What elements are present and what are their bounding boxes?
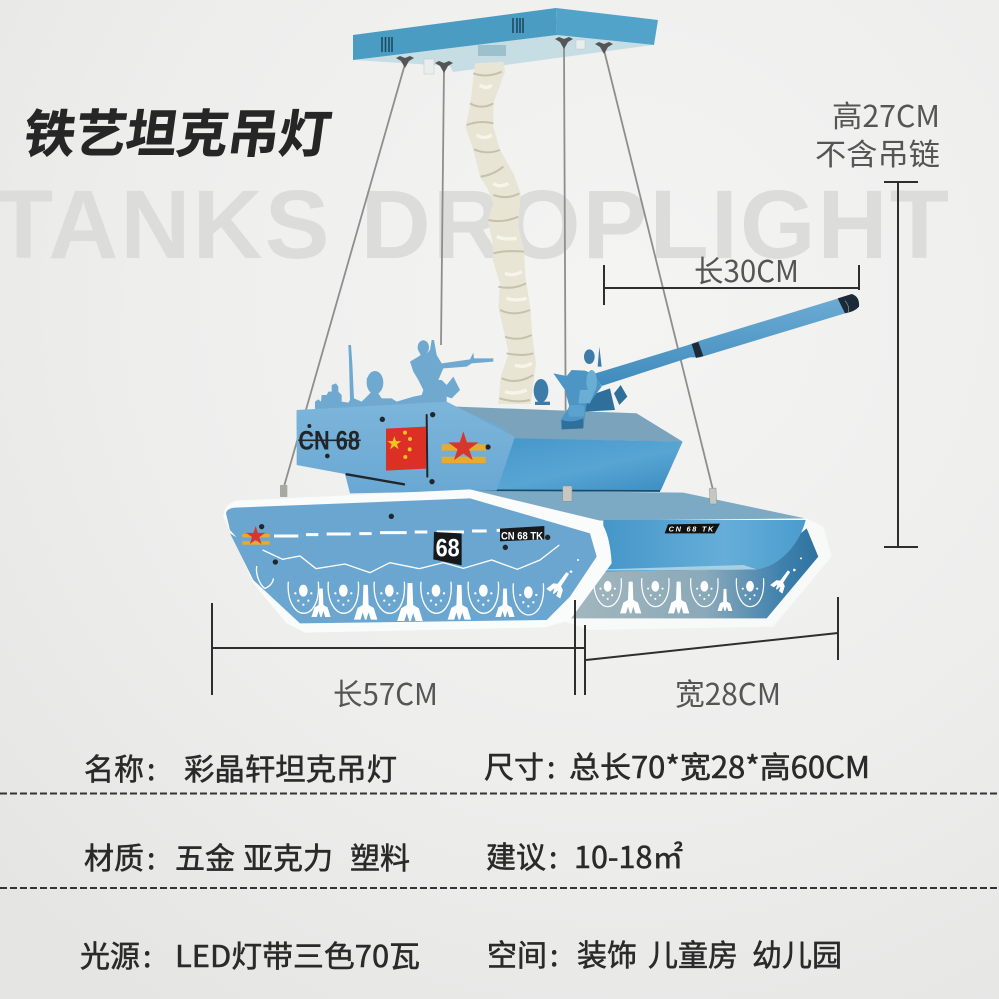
row 3 right: space: 空间	[487, 931, 547, 975]
row 2 left: material	[84, 834, 410, 878]
flag	[386, 427, 426, 471]
tank front: upper panel and track	[223, 402, 612, 633]
dimension: barrel length	[604, 247, 859, 305]
title: 铁艺坦克吊灯	[20, 106, 334, 163]
row 1 left: name: :	[147, 745, 155, 789]
fabric cord cover	[465, 62, 536, 404]
row 1 right: size: :	[547, 743, 555, 787]
row 3 left: light source: 光源	[80, 932, 140, 976]
dimension: height	[815, 92, 940, 547]
dimension: barrel length: 长30CM	[694, 247, 799, 291]
row 3 right: space	[487, 931, 842, 975]
row 1 left: name	[84, 745, 397, 789]
turret rear shields and silhouette	[534, 347, 627, 412]
row 3 right: space: 幼儿园	[752, 931, 842, 975]
rear track	[570, 528, 818, 618]
row 2 right: area: 10-18㎡	[574, 833, 683, 877]
gun mount	[553, 370, 602, 429]
row 3 left: light source	[80, 932, 420, 976]
row 3 right: space: :	[550, 931, 558, 975]
front ferrule	[280, 485, 287, 497]
upper panel	[297, 402, 515, 493]
row 2 left: material: 五金	[175, 834, 235, 878]
plate 68: 68	[436, 536, 460, 563]
front track halo	[223, 489, 612, 633]
row 3 right: space: 装饰	[577, 931, 637, 975]
ceiling plate	[353, 8, 658, 74]
row 1 right: size: 尺寸	[484, 743, 544, 787]
row 1 left: name: 彩晶轩坦克吊灯	[184, 745, 397, 789]
row 2 right: area: :	[549, 833, 557, 877]
watermark heading: TANKS DROPLIGHT	[0, 170, 949, 279]
row 2 left: material: :	[147, 834, 155, 878]
rear track halo	[560, 513, 832, 630]
turret	[440, 406, 683, 491]
row 1 left: name: 名称	[84, 745, 144, 789]
dimension: width	[585, 597, 838, 714]
plate CN 68 TK: CN 68 TK	[669, 524, 714, 533]
dimension: height: 高27CM	[832, 92, 940, 136]
row 2 right: area: 建议	[486, 833, 546, 877]
dimension: body length	[212, 600, 585, 714]
track wavy line	[263, 545, 559, 573]
lower hull	[440, 490, 806, 572]
front track panel	[226, 498, 597, 623]
row 2 left: material: 亚克力	[243, 834, 333, 878]
row 2 left: material: 塑料	[350, 834, 410, 878]
wire ferrules	[563, 486, 717, 504]
CN 68 marking: CN 68	[298, 425, 360, 455]
dimension: height: 不含吊链	[815, 130, 940, 174]
screws	[307, 412, 491, 484]
suspension wires	[283, 45, 713, 490]
spec table	[0, 743, 999, 976]
dark stripes	[347, 415, 427, 484]
star emblem	[442, 431, 486, 463]
row 3 right: space: 儿童房	[648, 931, 738, 975]
gun barrel	[593, 294, 859, 386]
row 2 right: area	[486, 833, 683, 877]
road wheels	[256, 559, 579, 621]
row 3 left: light source: LED灯带三色70瓦	[175, 932, 420, 976]
plate CN 68 TK: CN 68 TK	[501, 530, 544, 542]
wire clips	[396, 37, 613, 73]
row 1 right: size: 总长70*宽28*高60CM	[569, 743, 870, 787]
upper panel silhouette	[297, 340, 510, 430]
tank rear: hull, turret, gun	[440, 406, 832, 630]
track stripe	[274, 530, 510, 536]
track screws	[259, 514, 550, 565]
dimension: body length: 长57CM	[333, 670, 438, 714]
track star emblem	[242, 526, 270, 545]
plate CN 68 TK	[500, 526, 544, 542]
row 3 left: light source: :	[143, 932, 151, 976]
row 2 left: material: 材质	[84, 834, 144, 878]
dimension: width: 宽28CM	[675, 670, 781, 714]
